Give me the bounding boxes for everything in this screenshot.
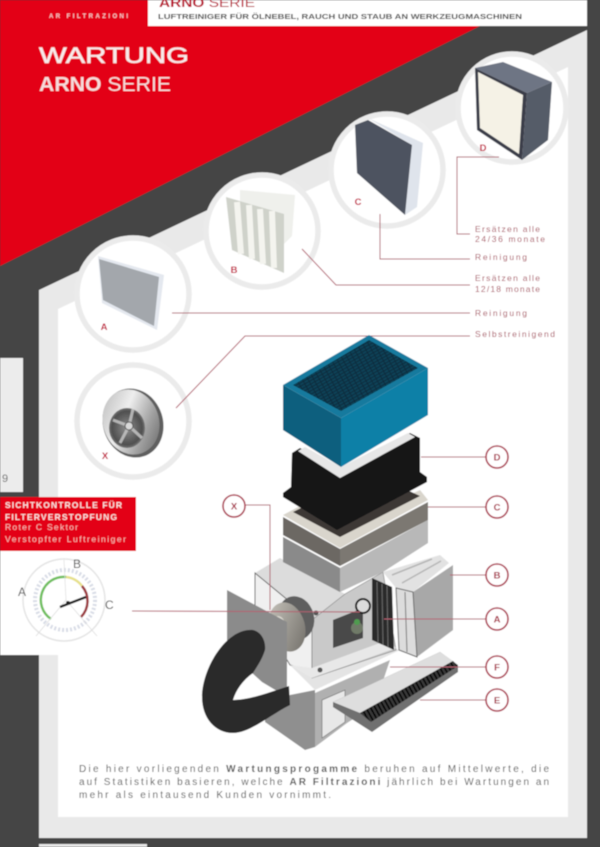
footer text xyxy=(79,764,549,801)
red info box: Roter C Sektor xyxy=(5,522,78,532)
leader lines to callouts xyxy=(132,457,486,700)
callout X xyxy=(223,495,245,517)
machine exploded view xyxy=(202,335,458,750)
footer text: Die hier vorliegenden Wartungsprogamme beruhen auf Mittelwerte, die xyxy=(79,764,549,775)
blue prefilter box xyxy=(283,335,428,467)
maintenance labels: 24/36 monate xyxy=(475,234,545,244)
callout E: E xyxy=(494,696,500,706)
maintenance labels: Reinigung xyxy=(475,252,527,262)
title xyxy=(39,43,189,96)
maintenance labels: Ersätzen alle xyxy=(475,224,540,234)
title: WARTUNG xyxy=(39,43,189,68)
footer text: mehr als eintausend Kunden vornimmt. xyxy=(79,790,331,801)
callout B: B xyxy=(494,570,501,582)
filter circle B: B xyxy=(231,265,238,276)
callout A: A xyxy=(494,614,501,626)
gauge: A xyxy=(18,585,26,599)
filter D layer xyxy=(283,433,427,530)
filter A slot xyxy=(372,578,394,650)
callout F xyxy=(486,656,508,678)
red diagonal banner xyxy=(0,0,480,266)
callout E xyxy=(486,689,508,711)
header bar: LUFTREINIGER FÜR ÖLNEBEL, RAUCH UND STAUB AN WERKZEUGMASCHINEN xyxy=(158,12,522,21)
red info box: SICHTKONTROLLE FÜR xyxy=(5,500,122,510)
callout C xyxy=(486,496,508,518)
title: ARNO SERIE xyxy=(39,74,171,96)
header bar xyxy=(148,0,587,26)
filter circle A xyxy=(77,238,189,350)
callout B xyxy=(486,564,508,586)
impeller circle X xyxy=(77,365,189,477)
callout D xyxy=(486,446,508,468)
page number tab xyxy=(0,358,23,492)
base cabinet xyxy=(265,640,400,750)
callout F: F xyxy=(494,662,500,674)
gauge panel background xyxy=(0,551,60,655)
callout A xyxy=(486,608,508,630)
filter circle C xyxy=(331,114,443,226)
page number tab: 9 xyxy=(2,473,8,485)
red info box: FILTERVERSTOPFUNG xyxy=(5,512,117,522)
red info box: Verstopfter Luftreiniger xyxy=(5,534,126,544)
brand name: AR FILTRAZIONI xyxy=(49,14,128,20)
filter B housing xyxy=(383,555,453,657)
hose xyxy=(202,630,290,733)
upper box xyxy=(283,520,428,592)
callout X: X xyxy=(231,502,238,512)
maintenance labels: Selbstreinigend xyxy=(475,329,555,339)
red info box xyxy=(0,497,136,551)
gauge: C xyxy=(105,598,114,612)
callout D: D xyxy=(494,452,501,464)
side plate xyxy=(227,590,287,697)
filter C layer xyxy=(283,489,428,566)
filter circle D: D xyxy=(480,143,487,154)
leader lines to maintenance labels xyxy=(172,157,499,408)
filter circle A: A xyxy=(101,322,108,333)
main body xyxy=(255,558,396,678)
gauge xyxy=(18,557,114,641)
filter circle B xyxy=(206,175,318,287)
tray xyxy=(333,652,458,732)
maintenance labels: 12/18 monate xyxy=(475,284,540,294)
maintenance labels xyxy=(475,224,555,339)
filter circle C: C xyxy=(355,197,362,208)
filter circle D xyxy=(458,54,566,162)
control box xyxy=(333,599,370,648)
gauge: B xyxy=(73,557,81,571)
callout C: C xyxy=(494,502,501,514)
impeller circle X: X xyxy=(102,451,109,462)
fan housing xyxy=(263,592,319,656)
maintenance labels: Reinigung xyxy=(475,308,527,318)
footer text: auf Statistiken basieren, welche AR Filtrazioni jährlich bei Wartungen an xyxy=(79,777,549,788)
maintenance labels: Ersätzen alle xyxy=(475,273,540,283)
